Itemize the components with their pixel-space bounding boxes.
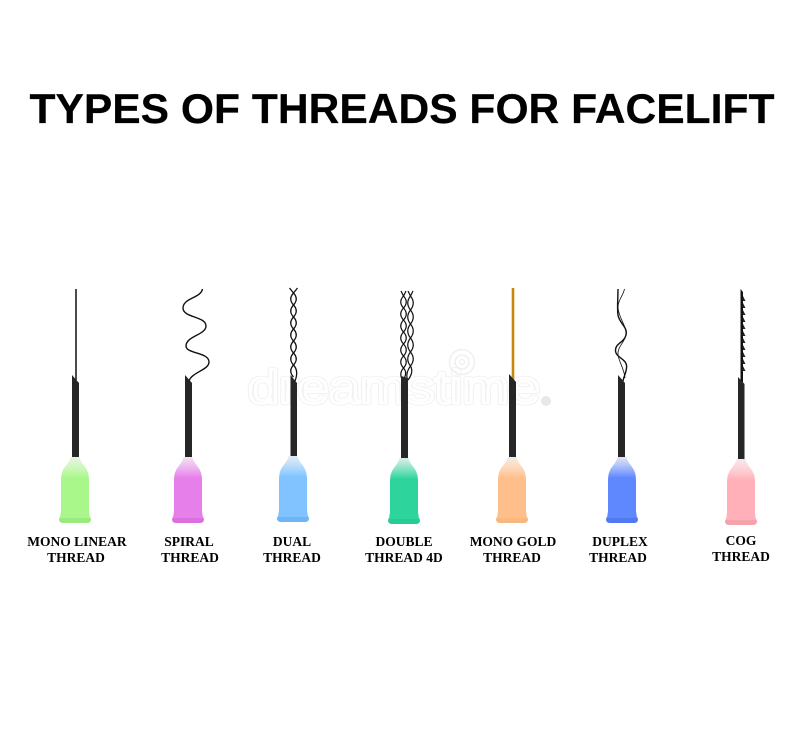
thread: mono linear [75, 289, 77, 380]
label: spiral thread: THREAD [161, 550, 219, 565]
thread: cog [740, 289, 746, 382]
thread: gold [512, 288, 514, 380]
needle: double thread 4D [388, 291, 420, 524]
label: double thread 4D: THREAD 4D [365, 550, 443, 565]
needle shaft [185, 375, 192, 458]
needle: dual thread [277, 288, 309, 522]
label: cog thread: THREAD [712, 549, 770, 564]
hub: green [59, 457, 91, 523]
hub: blue [606, 457, 638, 523]
hub: light blue [277, 456, 309, 522]
label: mono gold thread: MONO GOLD [470, 534, 557, 549]
label: cog thread: COG [726, 533, 757, 548]
needle shaft [290, 375, 297, 458]
title: TYPES OF THREADS FOR FACELIFT [30, 85, 775, 132]
label: dual thread: THREAD [263, 550, 321, 565]
needle: cog thread [725, 289, 757, 525]
label: mono linear thread: THREAD [47, 550, 105, 565]
needle shaft [618, 375, 625, 458]
hub: pink-violet [172, 457, 204, 523]
watermark: dreamstime [248, 361, 540, 413]
label: duplex thread: THREAD [589, 550, 647, 565]
thread: dual twisted [290, 288, 298, 381]
watermark [248, 350, 551, 413]
thread: duplex [615, 289, 627, 381]
label: mono gold thread: THREAD [483, 550, 541, 565]
label: double thread 4D: DOUBLE [375, 534, 433, 549]
needle: mono gold thread [496, 288, 528, 523]
label: duplex thread: DUPLEX [592, 534, 648, 549]
label: mono linear thread: MONO LINEAR [27, 534, 127, 549]
thread: spiral [183, 289, 209, 381]
needle: spiral thread [172, 289, 209, 523]
needle shaft [509, 374, 516, 458]
label: dual thread: DUAL [273, 534, 311, 549]
thread: double twisted [401, 291, 413, 380]
needle shaft [738, 377, 744, 460]
label: spiral thread: SPIRAL [164, 534, 214, 549]
hub: light pink [725, 459, 757, 525]
needle: mono linear thread [59, 289, 91, 523]
hub: orange [496, 457, 528, 523]
watermark: dreamstime [248, 361, 540, 413]
needle shaft [401, 376, 408, 458]
hub: teal green [388, 458, 420, 524]
needle: duplex thread [606, 289, 638, 523]
needle shaft [72, 375, 79, 458]
